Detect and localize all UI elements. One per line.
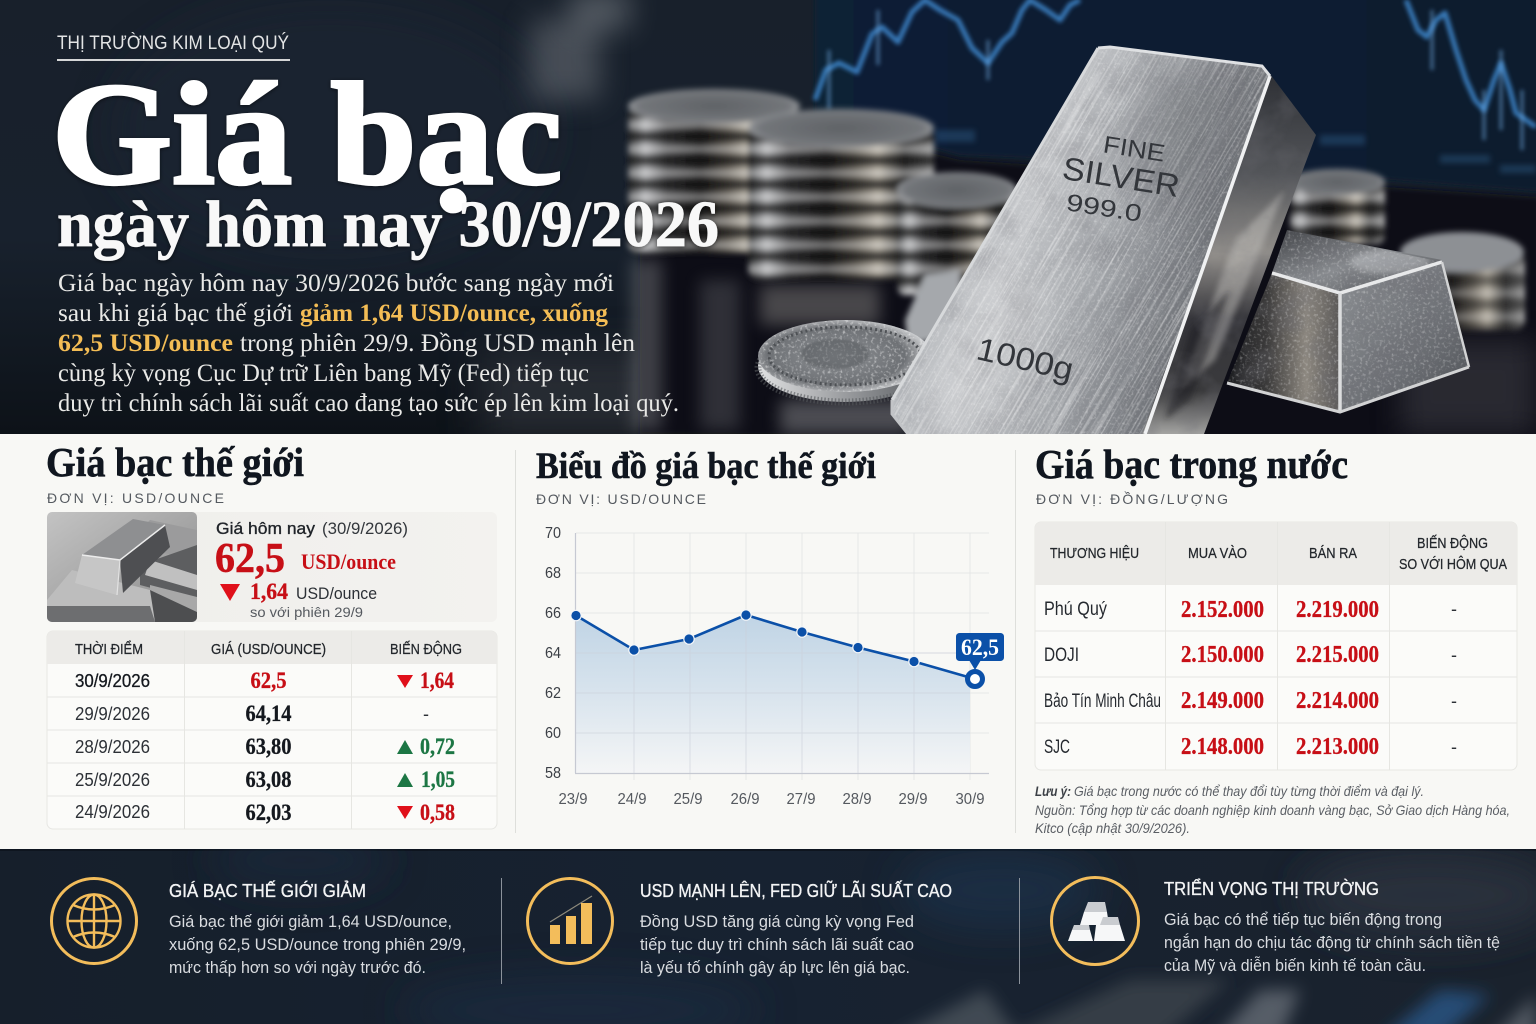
takeaway body: xuống 62,5 USD/ounce trong phiên 29/9, xyxy=(169,935,466,954)
takeaway body xyxy=(640,912,914,977)
footnote: Kitco (cập nhật 30/9/2026). xyxy=(1035,820,1190,836)
intro paragraph: cùng kỳ vọng Cục Dự trữ Liên bang Mỹ (Fed) tiếp tục xyxy=(58,360,589,387)
line chart xyxy=(545,525,1004,808)
today price card: USD/ounce xyxy=(301,549,396,574)
blurred coin stacks xyxy=(628,89,1525,345)
intro paragraph: sau khi giá bạc thế giới xyxy=(58,300,293,327)
price history table: GIÁ (USD/OUNCE) xyxy=(211,641,326,658)
domestic price table: 2.213.000 xyxy=(1296,734,1379,760)
domestic price table: SJC xyxy=(1044,737,1070,758)
thumbnail: silver bars xyxy=(47,512,197,622)
intro paragraph: duy trì chính sách lãi suất cao đang tạo sức ép lên kim loại quý. xyxy=(58,390,679,417)
takeaway: USD and Fed xyxy=(528,878,952,977)
domestic price table: Bảo Tín Minh Châu xyxy=(1044,691,1161,712)
x axis labels: 26/9 xyxy=(730,791,760,808)
takeaway body: của Mỹ và diễn biến kinh tế toàn cầu. xyxy=(1164,956,1426,975)
hero photo background xyxy=(0,0,1536,434)
price history table: 24/9/2026 xyxy=(75,802,150,822)
x axis labels: 29/9 xyxy=(898,791,928,808)
footnote: Lưu ý: xyxy=(1035,783,1071,799)
large silver bar xyxy=(890,46,1316,434)
domestic price table: BÁN RA xyxy=(1309,545,1357,562)
price history table: 1,05 xyxy=(421,767,455,792)
engraved bar markings: SILVER xyxy=(1060,150,1182,204)
engraved bar markings: 1000g xyxy=(973,330,1077,388)
takeaway heading: GIÁ BẠC THẾ GIỚI GIẢM xyxy=(169,880,366,901)
x axis labels: 28/9 xyxy=(842,791,872,808)
domestic price table: THƯƠNG HIỆU xyxy=(1050,545,1139,562)
silver coin xyxy=(755,318,935,402)
x axis labels: 24/9 xyxy=(618,791,647,808)
heading: domestic: Giá bạc trong nước xyxy=(1035,441,1348,487)
x axis labels xyxy=(558,791,985,808)
price history table: 63,80 xyxy=(246,734,292,759)
x axis labels: 30/9 xyxy=(956,791,985,808)
data section background xyxy=(0,434,1536,849)
price history table: THỜI ĐIỂM xyxy=(75,640,143,658)
panel: world silver price xyxy=(46,439,497,829)
y axis labels: 62 xyxy=(545,685,561,702)
takeaway heading: USD MẠNH LÊN, FED GIỮ LÃI SUẤT CAO xyxy=(640,880,952,901)
panel: chart xyxy=(536,446,1004,808)
price history table: 62,03 xyxy=(246,800,292,825)
today price card: 1,64 xyxy=(250,579,288,604)
price history table xyxy=(47,631,497,829)
price history table: 64,14 xyxy=(246,701,292,726)
heading: world price: Giá bạc thế giới xyxy=(46,439,304,485)
price history table: 1,64 xyxy=(420,668,454,693)
small silver bar xyxy=(1225,225,1475,415)
takeaway body: ngắn hạn do chịu tác động từ chính sách tiền tệ xyxy=(1164,933,1500,952)
domestic price table: 2.148.000 xyxy=(1181,734,1264,760)
price history table: BIẾN ĐỘNG xyxy=(390,641,462,658)
takeaway body: mức thấp hơn so với ngày trước đó. xyxy=(169,958,426,977)
domestic price table: 2.149.000 xyxy=(1181,688,1264,714)
domestic price table: 2.152.000 xyxy=(1181,597,1264,623)
panel: domestic silver price xyxy=(1035,441,1517,836)
latest price marker: 62,5 xyxy=(961,635,999,660)
footnote xyxy=(1035,783,1510,836)
takeaway body: Giá bạc thế giới giảm 1,64 USD/ounce, xyxy=(169,912,452,931)
price history table: 29/9/2026 xyxy=(75,704,150,724)
today price: 62,5 xyxy=(215,536,285,582)
domestic price table: - xyxy=(1451,645,1457,665)
engraved bar markings: FINE xyxy=(1101,131,1167,168)
takeaway: market outlook xyxy=(1052,878,1500,975)
y axis labels: 60 xyxy=(545,725,561,742)
engraved bar markings xyxy=(973,131,1182,388)
icon: silver bars xyxy=(1052,878,1138,964)
today price card: (30/9/2026) xyxy=(322,519,408,538)
unit label: ĐƠN VỊ: USD/OUNCE xyxy=(47,490,224,506)
latest price marker xyxy=(956,633,1004,686)
heading: chart: Biểu đồ giá bạc thế giới xyxy=(536,446,876,487)
market screen with blurred chart xyxy=(815,0,1536,192)
domestic price table: DOJI xyxy=(1044,645,1079,666)
icon: bar chart xyxy=(528,878,612,964)
today price card: USD/ounce xyxy=(296,584,377,603)
icon: globe xyxy=(52,878,136,964)
domestic price table xyxy=(1035,522,1517,770)
domestic price table: 2.150.000 xyxy=(1181,642,1264,668)
takeaway: world price falls xyxy=(52,878,466,977)
intro paragraph: giảm 1,64 USD/ounce, xuống xyxy=(300,300,608,327)
domestic price table: - xyxy=(1451,599,1457,619)
intro paragraph: 62,5 USD/ounce xyxy=(58,330,233,357)
domestic price table: MUA VÀO xyxy=(1188,545,1247,562)
domestic price table: BIẾN ĐỘNG xyxy=(1417,535,1488,552)
x axis labels: 23/9 xyxy=(558,791,588,808)
title: ngày hôm nay 30/9/2026 xyxy=(57,188,719,261)
y axis labels: 70 xyxy=(545,525,561,542)
kicker: THỊ TRƯỜNG KIM LOẠI QUÝ xyxy=(57,32,289,54)
x axis labels: 25/9 xyxy=(674,791,703,808)
today price card: so với phiên 29/9 xyxy=(250,604,363,620)
y axis labels: 58 xyxy=(545,765,561,782)
takeaway body: Giá bạc có thể tiếp tục biến động trong xyxy=(1164,910,1442,929)
price history table: - xyxy=(423,704,429,724)
title: Giá bạc xyxy=(52,53,562,215)
y axis labels xyxy=(545,525,561,782)
bottom band background xyxy=(0,830,1536,1024)
y axis labels: 66 xyxy=(545,605,561,622)
price history table: 30/9/2026 xyxy=(75,671,150,691)
domestic price table: - xyxy=(1451,737,1457,757)
title xyxy=(52,53,719,261)
footnote: Giá bạc trong nước có thể thay đổi tùy từng thời điểm và đại lý. xyxy=(1074,783,1424,799)
domestic price table: 2.214.000 xyxy=(1296,688,1379,714)
chart unit label: ĐƠN VỊ: USD/OUNCE xyxy=(536,491,706,507)
price history table: 62,5 xyxy=(250,668,286,693)
x axis labels: 27/9 xyxy=(786,791,816,808)
y axis labels: 68 xyxy=(545,565,561,582)
price history table: 28/9/2026 xyxy=(75,737,150,757)
domestic price table: SO VỚI HÔM QUA xyxy=(1399,556,1507,573)
reflective table xyxy=(632,125,1536,440)
domestic price table: 2.219.000 xyxy=(1296,597,1379,623)
takeaway heading: TRIỂN VỌNG THỊ TRƯỜNG xyxy=(1164,878,1379,899)
domestic unit label: ĐƠN VỊ: ĐỒNG/LƯỢNG xyxy=(1036,490,1228,507)
price line xyxy=(576,615,975,679)
takeaway body: tiếp tục duy trì chính sách lãi suất cao xyxy=(640,935,914,954)
domestic price table: - xyxy=(1451,691,1457,711)
price history table: 63,08 xyxy=(246,767,292,792)
price history table: 0,72 xyxy=(420,734,455,759)
today label: Giá hôm nay xyxy=(216,519,316,538)
intro paragraph: trong phiên 29/9. Đồng USD mạnh lên xyxy=(240,330,635,357)
engraved bar markings: 999.0 xyxy=(1064,189,1144,228)
y axis labels: 64 xyxy=(545,645,561,662)
domestic price table: Phú Quý xyxy=(1044,599,1107,620)
change indicator xyxy=(220,584,240,601)
takeaway body: là yếu tố chính gây áp lực lên giá bạc. xyxy=(640,958,910,977)
today price card xyxy=(47,512,407,622)
price history table: 25/9/2026 xyxy=(75,770,150,790)
intro paragraph xyxy=(58,270,679,417)
takeaway body xyxy=(1164,910,1500,975)
takeaway body xyxy=(169,912,466,977)
takeaway body: Đồng USD tăng giá cùng kỳ vọng Fed xyxy=(640,912,914,931)
intro paragraph: Giá bạc ngày hôm nay 30/9/2026 bước sang ngày mới xyxy=(58,270,614,297)
domestic price table: 2.215.000 xyxy=(1296,642,1379,668)
price history table: 0,58 xyxy=(420,800,455,825)
